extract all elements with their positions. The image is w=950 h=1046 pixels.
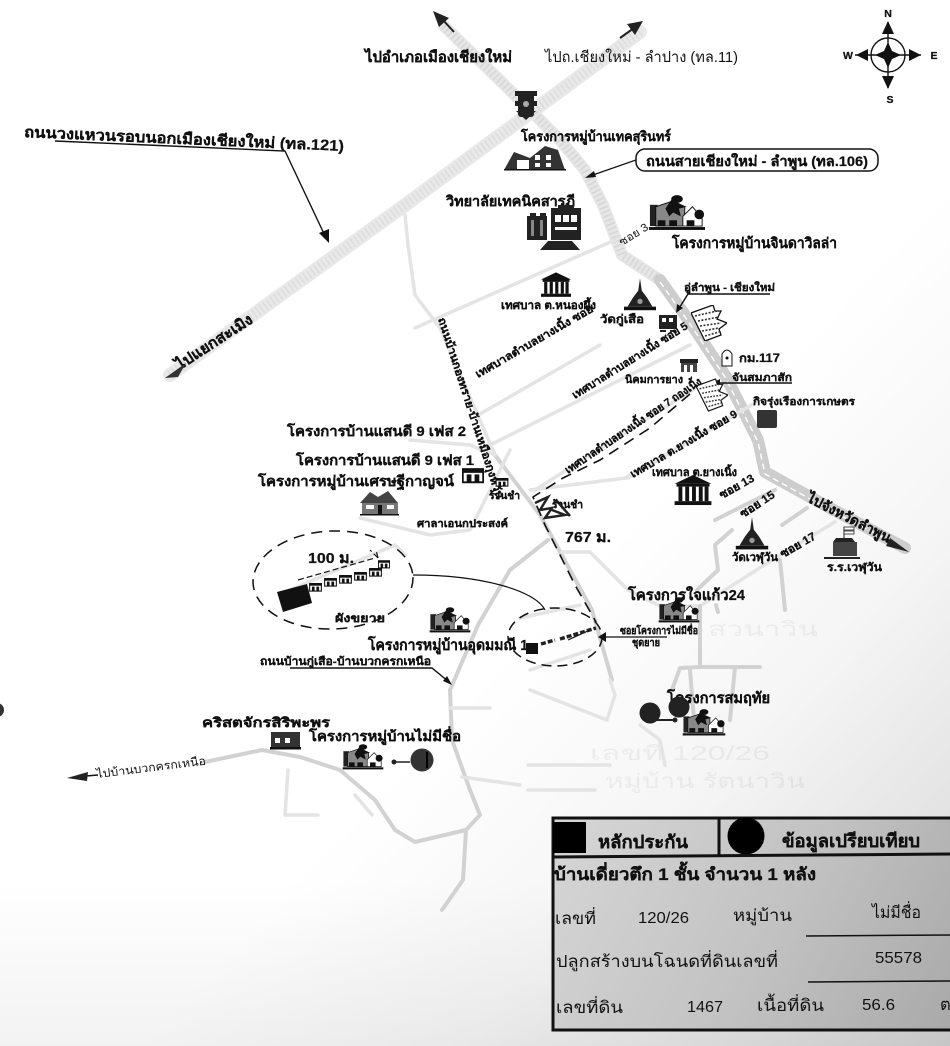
label: Sandee 9 phase 2: โครงการบ้านแสนดี 9 เฟส 2 [286, 422, 466, 439]
label: multipurpose hall: ศาลาเอนกประสงค์ [417, 517, 508, 530]
land area: 56.6 [862, 997, 895, 1014]
callout: Jan Som Phasak [712, 372, 792, 387]
pointer [290, 668, 452, 685]
icon: Jinda Villa village [649, 195, 705, 230]
arrow head [165, 363, 186, 378]
icon: Weluwan school [824, 527, 860, 559]
road: local road south [495, 455, 612, 680]
label: to Chiang Mai - Lampang road: ไปถ.เชียงใหม่ - ลำปาง (ทล.11) [544, 48, 738, 66]
house number: 120/26 [638, 910, 689, 927]
expanded plan ellipse [251, 528, 415, 632]
legend panel [553, 818, 950, 1030]
site ellipse [508, 608, 602, 666]
icon: Som Ruethai village [683, 709, 725, 735]
label: to Ban Buak Krok Nuea: ไปบ้านบวกครกเหนือ [95, 755, 207, 781]
road network [170, 26, 905, 910]
road: west to Buak Krok [205, 750, 466, 842]
faint show-through text: สวนาวิน [708, 619, 818, 641]
arrow: to Lamphun [886, 538, 909, 552]
collateral square [277, 584, 312, 612]
road: 106 north stipple [444, 26, 660, 280]
label: Sandee 9 phase 1: โครงการบ้านแสนดี 9 เฟส 1 [295, 451, 474, 468]
collateral key [553, 822, 689, 853]
label: rubber estate: นิคมการยาง [625, 374, 683, 386]
label: grocery: ร้านชำ [489, 489, 520, 502]
road: highway stipple [170, 32, 640, 375]
label: Siriphaphon church: คริสตจักรสิริพะพร [202, 715, 330, 730]
arrow: to Ban Buak Krok Nuea [67, 772, 98, 781]
layout label: ผังขยาย [335, 612, 385, 625]
label: unnamed village: โครงการหมู่บ้านไม่มีชื่อ [308, 726, 461, 745]
icon: bus garage [659, 315, 677, 332]
callout: Jan Som Phasak: จันสมภาสัก [732, 372, 792, 384]
icon: Yang Noeng municipality [675, 475, 711, 505]
icon: farm store [757, 410, 777, 428]
land number label: เลขที่ดิน [556, 996, 623, 1017]
label: Technical college: วิทยาลัยเทคนิคสารภี [445, 193, 575, 209]
label: Yang Noeng municipality: เทศบาล ต.ยางเนิ้ง [652, 464, 737, 479]
icon: unnamed village [343, 744, 383, 769]
arrow: unnamed soi pointer [568, 630, 667, 642]
scan mark at left edge [0, 703, 4, 717]
village value: ไม่มีชื่อ [870, 901, 921, 922]
house number label: เลขที่ [555, 907, 596, 928]
label: unnamed project soi [620, 623, 698, 649]
label: Jinda Villa: โครงการหมู่บ้านจินดาวิลล่า [671, 234, 837, 252]
label: municipal soi: เทศบาลตำบลยางเนิ้ง ซอย [472, 301, 596, 381]
comparison markers [640, 696, 690, 724]
100 m label: 100 ม. [308, 550, 354, 567]
title deed label: ปลูกสร้างบนโฉนดที่ดินเลขที่ [556, 950, 778, 972]
distance measure [298, 550, 378, 580]
icon: Wat Weluwan [736, 517, 768, 549]
compass rose: W [843, 50, 853, 62]
comparison key [728, 818, 920, 854]
label: Jai Kaew 24: โครงการใจแก้ว24 [627, 585, 746, 604]
label: to Mueang Chiang Mai: ไปอำเภอเมืองเชียงใหม่ [363, 47, 512, 66]
road: Ban Klong Sai local road north [405, 215, 495, 455]
label: main local road vertical: ถนนบ้านกองทราย-บ้านเหมืองกุงหวัน [434, 316, 506, 501]
callout: ring road 121 [24, 123, 344, 243]
label and arrow: to Mae Sa Mueng junction: ไปแยกสะเมิง [170, 309, 256, 374]
label: unnamed project soi: ซอยโครงการไม่มีชื่อ [620, 623, 698, 637]
arrow: to city north-west [433, 11, 454, 32]
icon: grocery [496, 478, 508, 486]
row houses small [541, 628, 596, 644]
title deed number: 55578 [875, 950, 922, 967]
faint show-through text [590, 619, 818, 794]
land area label: เนื้อที่ดิน [757, 993, 824, 1015]
icon: hatched building 2 [696, 379, 728, 411]
icon: traffic light [515, 91, 537, 120]
village label: หมู่บ้าน [733, 907, 792, 926]
icon: college building [527, 205, 581, 250]
label: Soi 15: ซอย 15 [738, 489, 778, 521]
compass rose: N [884, 8, 892, 20]
icon: Setthi house [360, 491, 399, 516]
label: 767 m: 767 ม. [565, 529, 611, 546]
label: Setthi Kanchan: โครงการหมู่บ้านเศรษฐีกาญจน์ [257, 472, 454, 491]
road sign: km 117 [722, 350, 780, 366]
road: Chiang Mai - Lamphun 106 north part [444, 26, 660, 280]
icon: Sandee house [462, 468, 484, 482]
label: Wat Weluwan: วัดเวฬุวัน [732, 551, 778, 565]
label: Soi 3: ซอย 3 [617, 221, 651, 249]
arrow: to north-east [620, 21, 643, 38]
label: Wat Ku Suea: วัดกู่เสือ [600, 313, 644, 327]
property type: บ้านเดี่ยวตึก 1 ชั้น จำนวน 1 หลัง [554, 861, 816, 884]
label: Soi 13: ซอย 13 [718, 473, 757, 502]
sub label: ชุดยาย [632, 638, 660, 649]
compass rose: E [930, 50, 938, 62]
pointer [676, 294, 770, 313]
compass rose [843, 8, 938, 106]
label: Nong Phueng municipality: เทศบาล ต.หนองผึ้ง [501, 297, 596, 312]
road: ring highway 121 [170, 32, 640, 375]
bottom shading [0, 880, 950, 1046]
pointer [712, 379, 792, 387]
label: Weluwan school: ร.ร.เวฬุวัน [827, 561, 883, 575]
label and icon: village store: ร้านชำ [552, 498, 583, 511]
icon: Thep Surin house [504, 146, 566, 170]
label: municipal soi 5: เทศบาลตำบลยางเนิ้ง ซอย 5 [569, 318, 690, 402]
side sois [415, 240, 760, 490]
icon: hatched building 1 [691, 305, 727, 341]
icon: church [270, 732, 301, 750]
label: Som Ruethai: โครงการสมฤทัย [666, 688, 770, 707]
icon: Wat Ku Suea [624, 278, 656, 310]
callout: Ban Ku Suea road [260, 655, 452, 685]
faint show-through text: หมู่บ้าน รัตนาวิน [605, 771, 805, 794]
icon: Jai Kaew village [659, 597, 699, 622]
label and icon: village store [535, 497, 583, 518]
row houses [309, 560, 390, 591]
label: Udom Manee 1: โครงการหมู่บ้านอุดมมณี 1 [367, 635, 528, 655]
icon: Nong Phueng municipality [541, 272, 571, 297]
route: dashed to collateral [533, 394, 690, 622]
callout: Lamphun - Chiang Mai garage [676, 280, 775, 313]
pointer arrow [585, 160, 636, 178]
road centre line [660, 282, 890, 541]
callout: highway 106 [585, 149, 878, 178]
road: south branch [442, 540, 548, 910]
label: to Lamphun: ไปจังหวัดลำพูน [802, 488, 895, 547]
callout: Ban Ku Suea road: ถนนบ้านกู่เสือ-บ้านบวกครกเหนือ [260, 655, 431, 669]
comparison key: ข้อมูลเปรียบเทียบ [782, 831, 920, 853]
land number: 1467 [687, 999, 723, 1016]
label: Soi 17: ซอย 17 [778, 531, 818, 561]
comparison marker: unnamed village [392, 748, 434, 772]
compass rose: S [886, 94, 894, 106]
road sign: km 117: กม.117 [739, 353, 780, 365]
icon: rubber estate [680, 359, 698, 372]
label: municipal soi 9: เทศบาล ต.ยางเนิ้ง ซอย 9 [627, 406, 740, 481]
label: Thep Surin village: โครงการหมู่บ้านเทคสุรินทร์ [520, 127, 672, 145]
callout: Lamphun - Chiang Mai garage: อู่ลำพูน - เชียงใหม่ [684, 280, 775, 295]
label: municipal soi 7: เทศบาลตำบลยางเนิ้ง ซอย 7 ถองเนิ้ง [561, 373, 704, 476]
connector curve between ellipses [413, 575, 545, 610]
callout: highway 106: ถนนสายเชียงใหม่ - ลำพูน (ทล.106) [646, 152, 868, 170]
label: Kit Rung Rueang farm store: กิจรุ่งเรืองการเกษตร [752, 395, 855, 409]
faint show-through text: เลขที่ 120/26 [590, 739, 770, 765]
road: 106 south part [660, 280, 905, 548]
collateral key: หลักประกัน [598, 832, 689, 852]
icon: Udom Manee village [430, 607, 470, 632]
ring road label: ถนนวงแหวนรอบนอกเมืองเชียงใหม่ (ทล.121) [24, 123, 344, 155]
underline and arrow [55, 141, 329, 243]
